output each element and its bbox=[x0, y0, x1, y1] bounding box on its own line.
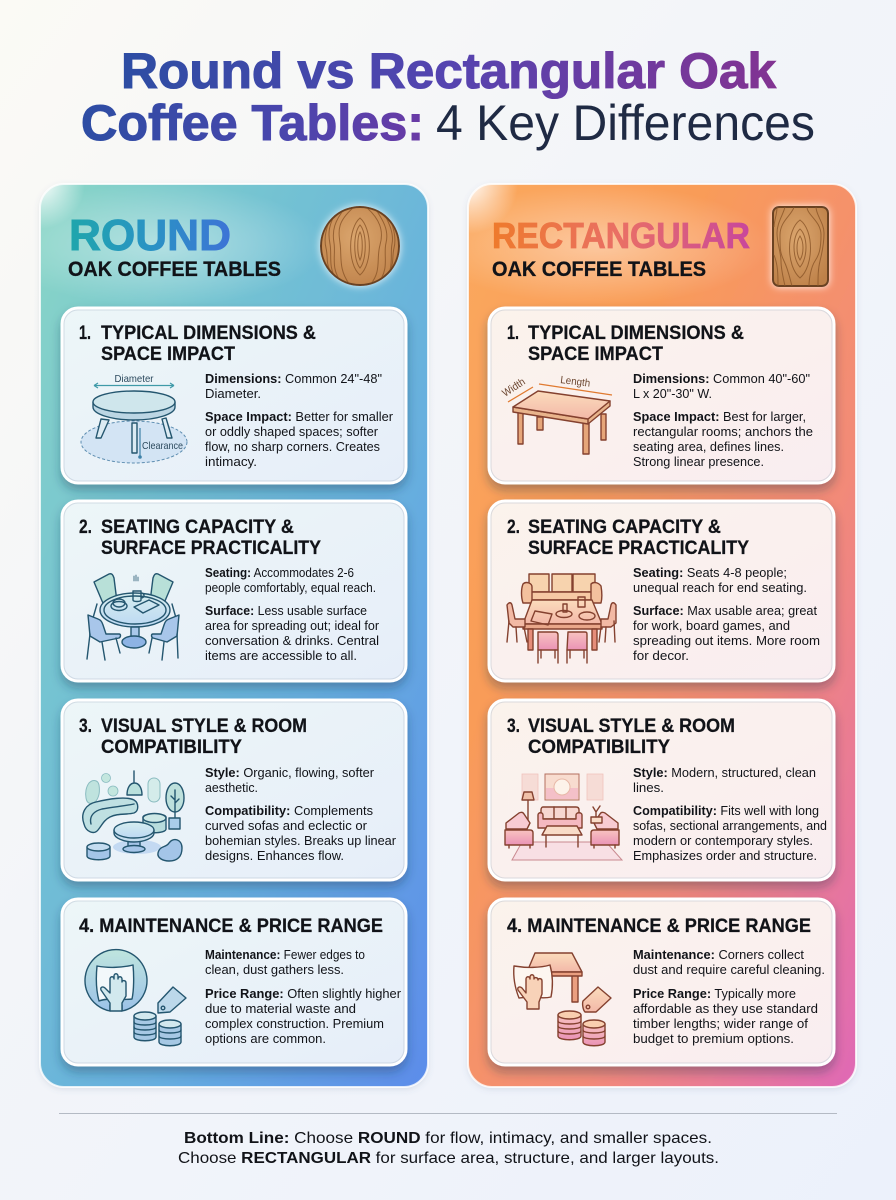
heading bbox=[79, 323, 316, 365]
text block: area for spreading out; ideal for bbox=[205, 618, 380, 633]
text block: people comfortably, equal reach. bbox=[205, 580, 376, 595]
text block: seating area, defines lines. bbox=[633, 439, 784, 454]
heading: TYPICAL DIMENSIONS & bbox=[101, 323, 316, 344]
bottom line text bbox=[178, 1130, 719, 1167]
heading: SPACE IMPACT bbox=[101, 344, 235, 365]
heading: 4. MAINTENANCE & PRICE RANGE bbox=[507, 916, 811, 937]
text block: modern or contemporary styles. bbox=[633, 833, 813, 848]
heading: 2. bbox=[507, 517, 520, 538]
text block: conversation & drinks. Central bbox=[205, 633, 379, 648]
text block: Style: Modern, structured, clean bbox=[633, 765, 816, 780]
heading: 3. bbox=[79, 716, 92, 737]
text block: Dimensions: Common 40"-60" bbox=[633, 371, 810, 386]
heading: SPACE IMPACT bbox=[528, 344, 663, 365]
text block: Compatibility: Fits well with long bbox=[633, 803, 819, 818]
text block: lines. bbox=[633, 780, 664, 795]
text block: Maintenance: Corners collect bbox=[633, 947, 804, 962]
icon: cleaning and price bbox=[514, 953, 611, 1046]
text block: clean, dust gathers less. bbox=[205, 962, 344, 977]
text block: Strong linear presence. bbox=[633, 454, 764, 469]
text block: Emphasizes order and structure. bbox=[633, 848, 817, 863]
card: round 1 dimensions bbox=[62, 308, 406, 483]
text block bbox=[205, 565, 380, 663]
text block: timber lengths; wider range of bbox=[633, 1016, 808, 1031]
text block: options are common. bbox=[205, 1031, 326, 1046]
card: rectangular 4 maintenance bbox=[489, 899, 834, 1065]
bottom line text: Choose RECTANGULAR for surface area, structure, and larger layouts. bbox=[178, 1150, 719, 1167]
icon: round table dimensions: Diameter bbox=[114, 373, 154, 385]
icon: rectangular table dimensions bbox=[500, 374, 612, 454]
text block: Price Range: Often slightly higher bbox=[205, 986, 402, 1001]
heading bbox=[507, 716, 735, 758]
text block: bohemian styles. Breaks up linear bbox=[205, 833, 397, 848]
heading: SURFACE PRACTICALITY bbox=[101, 538, 321, 559]
text block: flow, no sharp corners. Creates bbox=[205, 439, 380, 454]
heading bbox=[79, 517, 321, 559]
heading: 2. bbox=[79, 517, 92, 538]
text block bbox=[633, 371, 813, 469]
text block: or oddly shaped spaces; softer bbox=[205, 424, 379, 439]
heading: COMPATIBILITY bbox=[528, 737, 670, 758]
panel heading: rectangular bbox=[492, 215, 750, 281]
text block: for decor. bbox=[633, 648, 689, 663]
text block: Style: Organic, flowing, softer bbox=[205, 765, 375, 780]
heading: 1. bbox=[507, 323, 519, 344]
heading: 1. bbox=[79, 323, 91, 344]
heading bbox=[79, 716, 307, 758]
heading: TYPICAL DIMENSIONS & bbox=[528, 323, 744, 344]
heading: COMPATIBILITY bbox=[101, 737, 242, 758]
text block bbox=[205, 765, 397, 863]
text block: sofas, sectional arrangements, and bbox=[633, 818, 827, 833]
panel heading: round: OAK COFFEE TABLES bbox=[68, 258, 281, 281]
panel heading: rectangular: OAK COFFEE TABLES bbox=[492, 258, 706, 281]
icon: rectangular oak top bbox=[773, 207, 828, 286]
text block: dust and require careful cleaning. bbox=[633, 962, 825, 977]
panel: round bbox=[38, 184, 430, 1091]
text block bbox=[205, 371, 394, 469]
heading: 4. MAINTENANCE & PRICE RANGE bbox=[79, 916, 383, 937]
icon: round oak top bbox=[321, 207, 399, 285]
heading: 3. bbox=[507, 716, 520, 737]
text block: Price Range: Typically more bbox=[633, 986, 796, 1001]
text block bbox=[633, 765, 827, 863]
text block: due to material waste and bbox=[205, 1001, 356, 1016]
heading: VISUAL STYLE & ROOM bbox=[101, 716, 307, 737]
icon: round table dimensions: Clearance bbox=[142, 440, 183, 452]
heading: SEATING CAPACITY & bbox=[528, 517, 721, 538]
text block: Seating: Accommodates 2-6 bbox=[205, 565, 354, 580]
icon: rectangular table dimensions: Length bbox=[560, 374, 591, 390]
text block: L x 20"-30" W. bbox=[633, 386, 712, 401]
icon: modern living room bbox=[505, 774, 622, 860]
card: round 3 style bbox=[62, 700, 406, 880]
text block: rectangular rooms; anchors the bbox=[633, 424, 813, 439]
text block: Surface: Less usable surface bbox=[205, 603, 367, 618]
text block: spreading out items. More room bbox=[633, 633, 820, 648]
icon: rectangular table dimensions: Width bbox=[500, 376, 528, 400]
text block: complex construction. Premium bbox=[205, 1016, 384, 1031]
title: 4 Key Differences bbox=[436, 95, 815, 151]
text block bbox=[633, 947, 825, 1046]
panel heading: rectangular: RECTANGULAR bbox=[492, 215, 750, 256]
panel: rectangular bbox=[466, 183, 858, 1091]
card: round 4 maintenance bbox=[62, 899, 406, 1065]
text block bbox=[633, 565, 820, 663]
heading bbox=[507, 517, 749, 559]
text block: items are accessible to all. bbox=[205, 648, 357, 663]
icon: round table dimensions bbox=[81, 373, 187, 463]
text block: for work, board games, and bbox=[633, 618, 790, 633]
card: rectangular 3 style bbox=[489, 700, 834, 880]
heading: SEATING CAPACITY & bbox=[101, 517, 294, 538]
icon: cleaning and price bbox=[85, 950, 186, 1046]
heading bbox=[507, 323, 744, 365]
card: rectangular 2 seating bbox=[489, 501, 834, 681]
text block: Compatibility: Complements bbox=[205, 803, 373, 818]
icon: sofa and rectangular table bbox=[507, 574, 616, 663]
text block: Space Impact: Better for smaller bbox=[205, 409, 394, 424]
title bbox=[81, 43, 815, 151]
heading: VISUAL STYLE & ROOM bbox=[528, 716, 735, 737]
text block: aesthetic. bbox=[205, 780, 258, 795]
text block: intimacy. bbox=[205, 454, 257, 469]
icon: organic living room bbox=[83, 771, 184, 861]
bottom line text: Bottom Line: Choose ROUND for flow, intimacy, and smaller spaces. bbox=[184, 1130, 712, 1147]
text block: curved sofas and eclectic or bbox=[205, 818, 368, 833]
text block: budget to premium options. bbox=[633, 1031, 794, 1046]
card: rectangular 1 dimensions bbox=[489, 308, 834, 483]
text block: affordable as they use standard bbox=[633, 1001, 818, 1016]
text block: unequal reach for end seating. bbox=[633, 580, 807, 595]
heading: SURFACE PRACTICALITY bbox=[528, 538, 749, 559]
text block: designs. Enhances flow. bbox=[205, 848, 344, 863]
text block: Surface: Max usable area; great bbox=[633, 603, 817, 618]
title: Coffee Tables: bbox=[81, 95, 424, 151]
icon: round table with chairs bbox=[87, 574, 179, 660]
text block: Dimensions: Common 24"-48" bbox=[205, 371, 382, 386]
text block: Space Impact: Best for larger, bbox=[633, 409, 806, 424]
text block bbox=[205, 947, 402, 1046]
text block: Maintenance: Fewer edges to bbox=[205, 947, 365, 962]
card: round 2 seating bbox=[62, 501, 406, 681]
text block: Diameter. bbox=[205, 386, 261, 401]
panel heading: round bbox=[68, 211, 281, 281]
title: Round vs Rectangular Oak bbox=[121, 43, 776, 99]
text block: Seating: Seats 4-8 people; bbox=[633, 565, 787, 580]
panel heading: round: ROUND bbox=[69, 211, 231, 260]
